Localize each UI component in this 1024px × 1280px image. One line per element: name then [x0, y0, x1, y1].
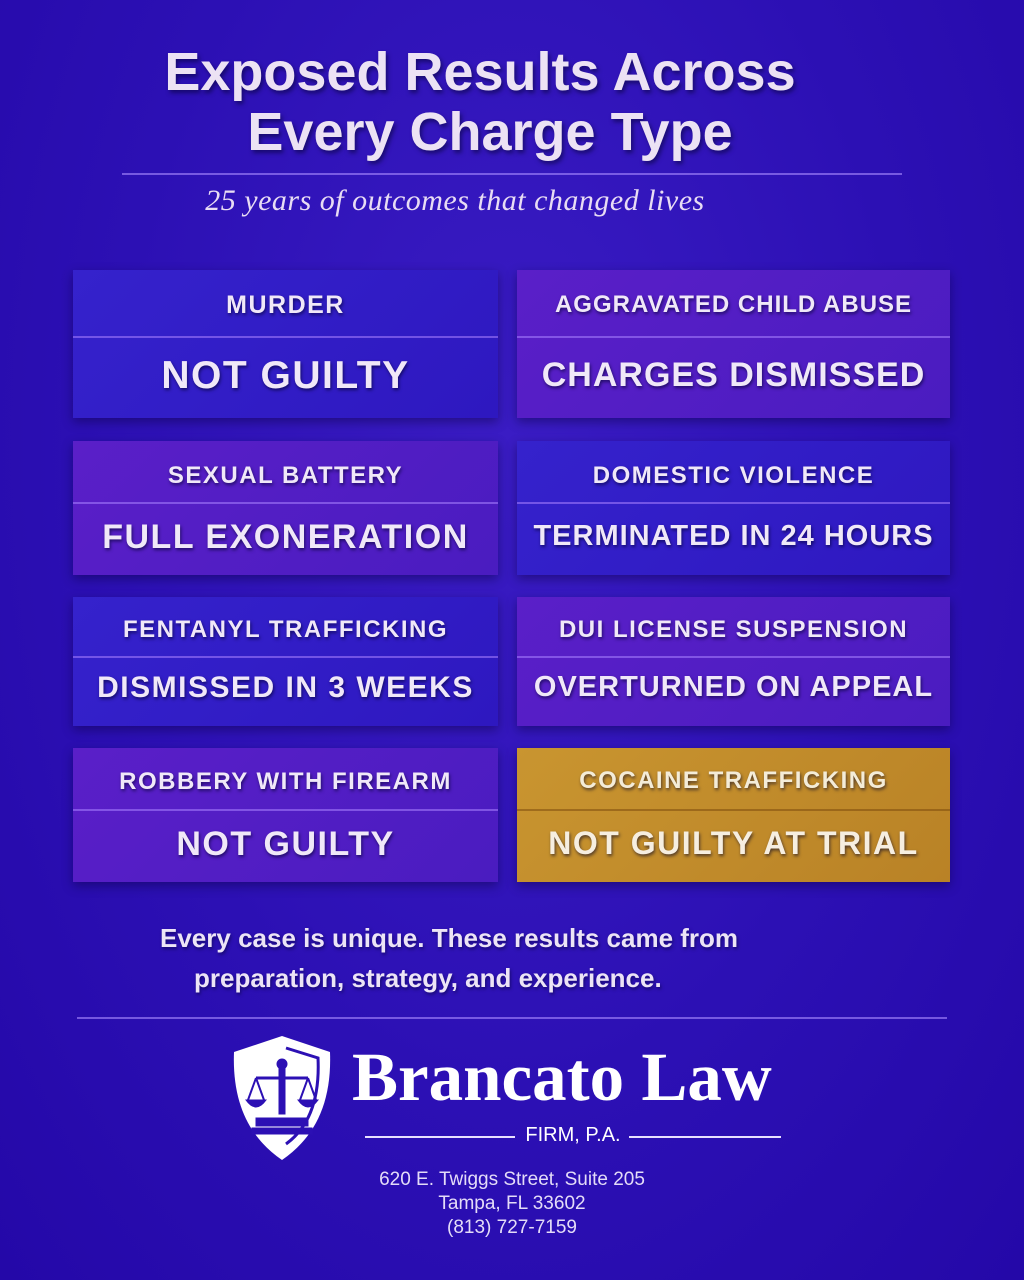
- card: dui: [517, 597, 950, 726]
- logo: firm tagline: FIRM, P.A.: [525, 1124, 621, 1146]
- logo: shield icon: [234, 1036, 330, 1160]
- card: sexual battery: FULL EXONERATION: [102, 518, 469, 556]
- card: cocaine: NOT GUILTY AT TRIAL: [548, 825, 919, 861]
- card: sexual battery: [73, 441, 498, 575]
- card: fentanyl: [73, 597, 498, 726]
- card: aggravated child abuse: CHARGES DISMISSED: [542, 356, 925, 394]
- card: aggravated child abuse: [517, 270, 950, 418]
- address: [379, 1169, 645, 1238]
- subtitle: 25 years of outcomes that changed lives: [205, 184, 705, 217]
- address: 620 E. Twiggs Street, Suite 205: [379, 1169, 645, 1190]
- card: robbery: ROBBERY WITH FIREARM: [119, 768, 452, 795]
- card: murder: MURDER: [226, 291, 345, 319]
- address: Tampa, FL 33602: [438, 1193, 586, 1214]
- card: robbery: [73, 748, 498, 882]
- card: dui: DUI LICENSE SUSPENSION: [559, 616, 908, 643]
- address: (813) 727-7159: [447, 1217, 577, 1238]
- card: domestic violence: DOMESTIC VIOLENCE: [593, 462, 874, 489]
- card: domestic violence: TERMINATED IN 24 HOURS: [533, 520, 934, 552]
- closing statement: preparation, strategy, and experience.: [194, 963, 662, 993]
- closing statement: [160, 923, 740, 996]
- card: dui: OVERTURNED ON APPEAL: [534, 671, 933, 703]
- title: Exposed Results Across: [164, 42, 796, 102]
- card: fentanyl: FENTANYL TRAFFICKING: [123, 616, 448, 643]
- logo: wordmark: Brancato Law: [352, 1039, 772, 1115]
- card: murder: NOT GUILTY: [161, 354, 410, 397]
- card: murder: [73, 270, 498, 418]
- card: aggravated child abuse: AGGRAVATED CHILD ABUSE: [555, 291, 912, 318]
- card: robbery: NOT GUILTY: [176, 825, 395, 863]
- closing statement: Every case is unique. These results came from: [160, 923, 738, 953]
- card: sexual battery: SEXUAL BATTERY: [168, 462, 403, 489]
- title: Every Charge Type: [247, 102, 733, 162]
- card: domestic violence: [517, 441, 950, 575]
- card: cocaine: [517, 748, 950, 882]
- title: [164, 42, 798, 166]
- card: fentanyl: DISMISSED IN 3 WEEKS: [97, 671, 474, 704]
- card: cocaine: COCAINE TRAFFICKING: [579, 767, 888, 794]
